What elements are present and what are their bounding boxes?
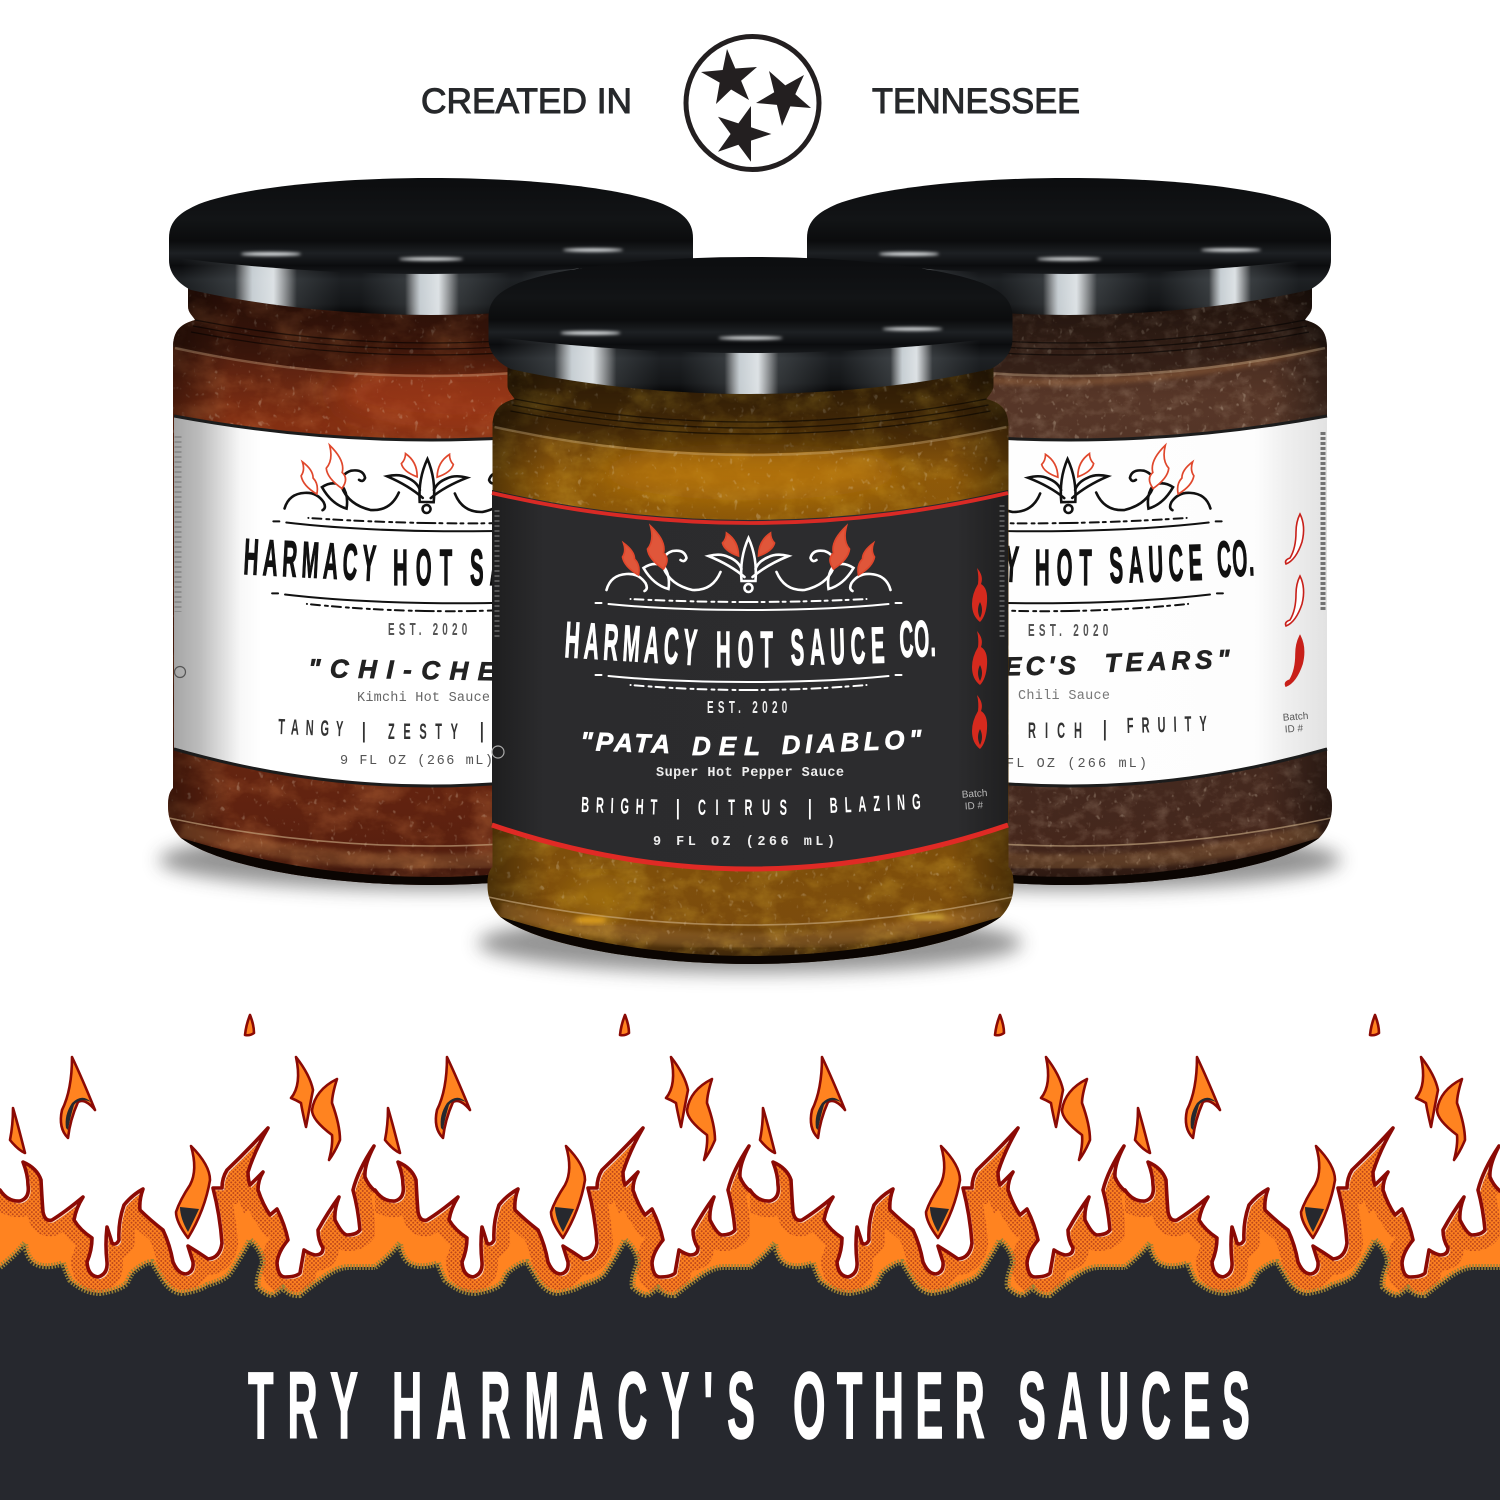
banner text: try Harmacy's other sauces: HARMACY'S	[392, 1353, 755, 1459]
jar: Chi-Che kimchi hot sauce	[166, 178, 696, 890]
label: white Aztec's Tears label: RICH	[1028, 718, 1082, 743]
label: black Pata del Diablo label: SAUCE	[790, 618, 885, 677]
label: white Aztec's Tears label: "AZTEC'S	[925, 650, 1080, 683]
label: white Chi-Che label: SAUCE	[470, 540, 565, 597]
flame border	[0, 1015, 1500, 1500]
label: white Chi-Che label: HARMACY	[242, 529, 377, 593]
label: white Aztec's Tears label: ID #	[1284, 723, 1304, 736]
label: black Pata del Diablo label: |	[675, 795, 681, 820]
label: white Chi-Che label: |	[361, 718, 367, 743]
label: white Aztec's Tears label: |	[1102, 716, 1108, 741]
label: white Aztec's Tears label: FRUITY	[1126, 711, 1207, 738]
icon: Tennessee tri-star	[686, 36, 819, 170]
label: white Aztec's Tears label: SAUCE	[1108, 535, 1203, 595]
label: white Aztec's Tears label: Batch	[1282, 711, 1309, 724]
label: white Chi-Che label: CO.	[575, 538, 611, 595]
label: white Aztec's Tears label: TEARS"	[1104, 644, 1231, 678]
label: black Pata del Diablo label: "PATA	[580, 726, 671, 759]
label: white Chi-Che label: "CHI-CHE	[308, 653, 496, 686]
label: white Aztec's Tears label: EST. 2020	[1028, 621, 1108, 641]
heading: created in Tennessee	[421, 82, 1080, 121]
label: white Aztec's Tears label: Chili Sauce	[1018, 689, 1110, 704]
label: black Pata del Diablo label: CITRUS	[698, 795, 787, 820]
jar: Pata del Diablo super hot pepper sauce	[486, 257, 1016, 969]
banner text: try Harmacy's other sauces	[248, 1353, 1250, 1459]
label: white Aztec's Tears label: HOT	[1035, 540, 1092, 597]
label: white Aztec's Tears label	[812, 416, 1327, 786]
label: black Pata del Diablo label: |	[807, 795, 813, 820]
label: black Pata del Diablo label: EST. 2020	[707, 698, 787, 718]
label: black Pata del Diablo label: DIABLO"	[781, 724, 923, 760]
label: black Pata del Diablo label: Super Hot Pepper Sauce	[656, 766, 844, 781]
label: black Pata del Diablo label: HOT	[716, 622, 773, 679]
label: black Pata del Diablo label: Batch	[961, 788, 988, 801]
heading: created in Tennessee: TENNESSEE	[872, 82, 1080, 121]
label: white Chi-Che label: Kimchi Hot Sauce	[357, 691, 490, 706]
label: white Chi-Che label: TANGY	[278, 714, 344, 741]
icon: flame heat rating	[972, 568, 987, 749]
label: white Chi-Che label: 9 FL OZ (266 mL)	[340, 754, 493, 769]
label: white Chi-Che label: |	[479, 718, 485, 743]
heading: created in Tennessee: CREATED IN	[421, 82, 632, 121]
label: white Aztec's Tears label: FL OZ (266 mL)	[1006, 757, 1147, 772]
label: white Chi-Che label: ZESTY	[388, 719, 458, 744]
banner text: try Harmacy's other sauces: OTHER	[793, 1353, 985, 1459]
label: black Pata del Diablo label: DEL	[692, 731, 760, 761]
label: black Pata del Diablo label: ID #	[964, 800, 984, 813]
label: white Chi-Che label: EST. 2020	[388, 620, 467, 640]
label: black Pata del Diablo label: 9 FL OZ (266 mL)	[653, 835, 835, 850]
label: black Pata del Diablo label	[492, 490, 1008, 869]
banner text: try Harmacy's other sauces: TRY	[248, 1353, 358, 1459]
label: black Pata del Diablo label: BRIGHT	[581, 792, 658, 820]
jar: Aztec's Tears chili sauce	[804, 178, 1334, 890]
icon: chili heat rating	[1286, 514, 1304, 686]
label: white Aztec's Tears label: HARMACY	[884, 530, 1020, 594]
jar shadows	[159, 830, 1341, 973]
label: black Pata del Diablo label: HARMACY	[563, 612, 699, 677]
label: white Chi-Che label	[174, 416, 688, 786]
label: black Pata del Diablo label: BLAZING	[829, 789, 921, 818]
label: white Chi-Che label: HOT	[393, 540, 452, 597]
label: black Pata del Diablo label: CO.	[898, 611, 936, 669]
banner text: try Harmacy's other sauces: SAUCES	[1018, 1353, 1250, 1459]
label: white Aztec's Tears label: CO.	[1216, 530, 1255, 589]
